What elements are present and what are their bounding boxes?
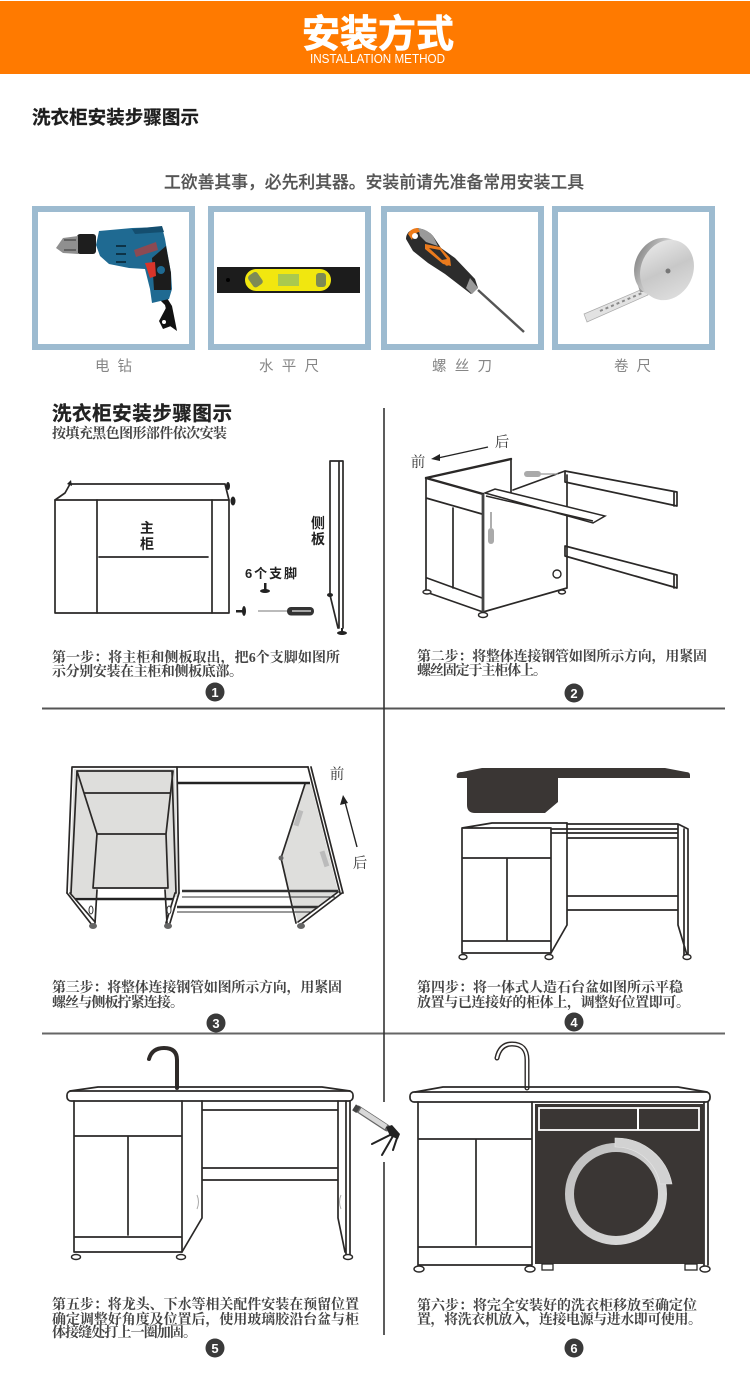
step text	[52, 649, 340, 680]
main cabinet	[55, 480, 236, 613]
step number	[564, 1012, 584, 1032]
step number	[206, 682, 224, 702]
step text	[417, 648, 707, 679]
step text: 螺丝与侧板拧紧连接。	[52, 994, 184, 1011]
step text: 第五步：将龙头、下水等相关配件安装在预留位置	[52, 1296, 359, 1313]
panel: tape measure	[555, 209, 712, 347]
panel: step 6	[410, 1044, 710, 1358]
countertop	[67, 1087, 353, 1101]
cabinet	[459, 823, 567, 960]
washing machine	[535, 1104, 704, 1270]
step number: 2	[570, 686, 578, 701]
section heading: 洗衣柜安装步骤图示	[32, 107, 199, 128]
label: drill: 电钻	[95, 358, 132, 375]
panel: step 3	[52, 766, 367, 1032]
panel: step 1	[52, 402, 347, 702]
connecting steel rails	[177, 767, 338, 912]
direction labels and arrow	[411, 434, 509, 471]
countertop	[410, 1087, 710, 1102]
side panel	[311, 461, 347, 635]
label: side panel second char: 板	[311, 531, 325, 547]
label: screwdriver: 螺丝刀	[432, 358, 492, 375]
step text: 第六步：将完全安装好的洗衣柜移放至确定位	[417, 1297, 697, 1314]
icon: faucet	[497, 1044, 527, 1088]
label: main cabinet: 主	[140, 520, 154, 536]
step hint: 按填充黑色图形部件依次安装	[52, 425, 227, 442]
icon: vertical screwdriver	[488, 512, 494, 544]
tools intro sentence: 工欲善其事，必先利其器。安装前请先准备常用安装工具	[164, 173, 584, 192]
frame	[551, 823, 691, 960]
direction labels and arrow: 后	[353, 855, 367, 872]
subtitle: INSTALLATION METHOD	[310, 52, 445, 66]
step number: 5	[211, 1341, 219, 1356]
panel: drill	[35, 209, 192, 347]
step number: 3	[212, 1016, 220, 1031]
control panel	[539, 1108, 699, 1130]
step text: 示分别安装在主柜和侧板底部。	[52, 663, 243, 680]
left panel gray	[67, 767, 179, 929]
direction labels and arrow: 后	[495, 434, 509, 451]
title: 安装方式	[302, 14, 454, 56]
step number	[564, 684, 584, 702]
right panel gray	[278, 767, 343, 929]
step number: 4	[570, 1015, 578, 1030]
icon: screwdriver	[406, 228, 524, 332]
icon: horizontal screwdriver	[524, 471, 558, 477]
upper steel tube	[565, 471, 677, 506]
panel: step 4	[417, 768, 691, 1032]
panel: step 5	[52, 1048, 359, 1358]
cabinet	[72, 1101, 186, 1260]
step text: 第二步：将整体连接钢管如图所示方向，用紧固	[417, 648, 707, 665]
door ring	[570, 1138, 672, 1240]
step text: 第四步：将一体式人造石台盆如图所示平稳	[417, 979, 684, 996]
step number: 1	[211, 685, 219, 700]
panel: level	[211, 209, 368, 347]
direction labels and arrow	[330, 766, 367, 872]
step text	[417, 1297, 702, 1328]
countertop and basin	[457, 768, 690, 813]
icon: faucet	[149, 1048, 177, 1088]
step number: 6	[570, 1341, 578, 1356]
foot icon top	[260, 583, 270, 593]
label: tape measure: 卷尺	[614, 358, 651, 375]
label: six feet: 6个支脚	[245, 566, 297, 581]
icon: spirit level	[217, 267, 360, 293]
foot icon left	[236, 606, 246, 616]
step number	[206, 1014, 226, 1032]
machine feet	[542, 1264, 697, 1270]
cabinet	[414, 1102, 710, 1272]
step number	[564, 1338, 584, 1358]
icon: drill	[56, 226, 177, 331]
step text: 确定调整好角度及位置后，使用玻璃胶沿台盆与柜	[52, 1311, 359, 1328]
direction labels and arrow: 前	[411, 454, 425, 471]
step text: 置，将洗衣机放入，连接电源与进水即可使用。	[417, 1311, 702, 1328]
lower steel tube	[565, 546, 677, 588]
step text: 第三步：将整体连接钢管如图所示方向，用紧固	[52, 979, 342, 996]
icon: screwdriver	[258, 607, 314, 616]
frame	[182, 1101, 352, 1260]
label: level: 水平尺	[259, 358, 319, 375]
step text	[417, 979, 690, 1011]
step number	[206, 1338, 224, 1358]
step text: 放置与已连接好的柜体上，调整好位置即可。	[417, 994, 690, 1011]
step text	[52, 979, 342, 1011]
step text	[52, 1296, 359, 1341]
label: cabinet second char: 柜	[140, 536, 154, 552]
icon: tape measure	[584, 229, 704, 322]
direction labels and arrow: 前	[330, 766, 344, 783]
step text: 体接缝处打上一圈加固。	[52, 1324, 197, 1341]
top rail	[485, 489, 605, 523]
cabinet frame	[423, 459, 567, 618]
step heading: 洗衣柜安装步骤图示	[52, 402, 232, 425]
icon: caulk gun	[352, 1104, 400, 1155]
label: side panel: 侧	[311, 515, 325, 531]
header banner	[0, 1, 750, 74]
panel: screwdriver	[384, 209, 541, 347]
step text: 第一步：将主柜和侧板取出，把6个支脚如图所	[52, 649, 340, 666]
dividers	[42, 408, 725, 1335]
panel: step 2	[411, 434, 707, 702]
step text: 螺丝固定于主柜体上。	[417, 662, 547, 679]
